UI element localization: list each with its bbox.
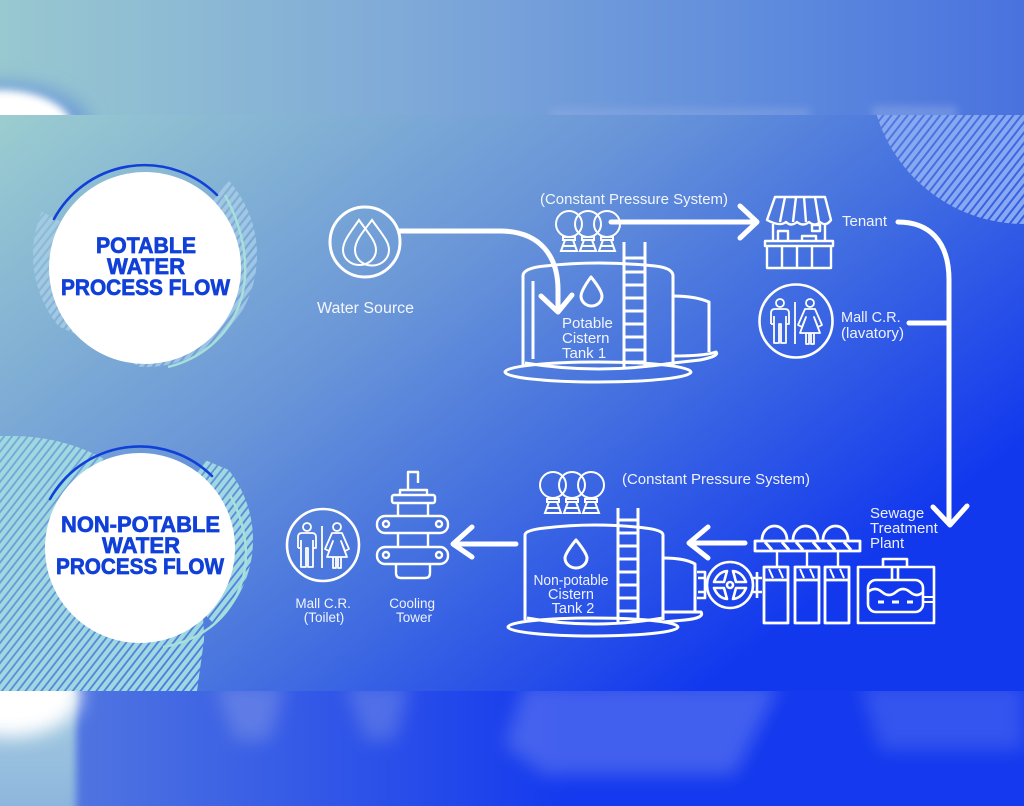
heading: potable: PROCESS FLOW	[61, 275, 230, 300]
arrow: pressure system to tenant	[611, 206, 757, 238]
label: non-potable cistern tank 2: Tank 2	[552, 601, 594, 617]
label: mall cr lavatory: (lavatory)	[841, 326, 904, 342]
icon: sewage treatment plant	[858, 559, 934, 623]
decorative stripes: bottom left	[0, 427, 253, 691]
main panel background	[0, 115, 1024, 691]
label: non-potable cistern tank 2: Cistern	[548, 587, 594, 603]
icon: valve	[697, 562, 762, 608]
arrow: tenant and lavatory to sewage treatment	[898, 222, 967, 525]
badge: potable water process flow	[33, 143, 257, 367]
icon: cooling tower	[377, 472, 448, 578]
icon: water source	[330, 207, 400, 277]
label: mall cr toilet: Mall C.R.	[295, 596, 351, 611]
top blurred band	[0, 0, 1024, 115]
ladder	[618, 508, 638, 623]
heading: non-potable: WATER	[102, 533, 180, 558]
label: sewage treatment plant: Plant	[870, 535, 905, 552]
label: non-potable cistern tank 2: Non-potable	[533, 573, 608, 589]
heading: non-potable: NON-POTABLE	[61, 512, 220, 537]
arrow: water source to tank 1	[400, 231, 572, 312]
label: constant pressure system 1: (Constant Pressure System)	[540, 191, 728, 208]
icon: mall restroom toilet	[287, 509, 359, 581]
badge: non-potable water process flow	[45, 446, 246, 647]
icon: filter units	[755, 526, 860, 623]
drop	[565, 540, 587, 568]
icon: pressure tanks 1	[556, 211, 620, 251]
label: potable cistern tank 1: Potable	[562, 315, 613, 332]
ladder	[624, 242, 645, 368]
heading: non-potable: PROCESS FLOW	[56, 554, 224, 579]
arrow: sewage plant to tank 2	[689, 527, 745, 558]
decorative stripes: top right	[876, 115, 1024, 224]
label: constant pressure system 2: (Constant Pressure System)	[622, 471, 810, 488]
heading: potable: WATER	[107, 254, 185, 279]
label: tenant: Tenant	[842, 213, 888, 230]
label: sewage treatment plant: Treatment	[870, 520, 939, 537]
label: mall cr lavatory: Mall C.R.	[841, 310, 901, 326]
icon: pressure tanks 2	[540, 472, 604, 513]
label: water source: Water Source	[317, 300, 414, 317]
label: cooling tower: Tower	[396, 610, 433, 625]
label: potable cistern tank 1: Tank 1	[562, 345, 606, 362]
arrow: tank 2 to cooling tower	[453, 527, 516, 557]
bottom blurred band	[0, 691, 1024, 806]
tank 1	[505, 242, 717, 382]
label: sewage treatment plant: Sewage	[870, 505, 924, 522]
heading: potable: POTABLE	[96, 233, 196, 258]
label: cooling tower: Cooling	[389, 596, 435, 611]
drop	[581, 277, 602, 306]
label: mall cr toilet: (Toilet)	[304, 610, 344, 625]
icon: tenant store	[765, 197, 833, 268]
tank 2	[508, 508, 702, 636]
icon: mall restroom lavatory	[760, 284, 832, 358]
label: potable cistern tank 1: Cistern	[562, 330, 610, 347]
